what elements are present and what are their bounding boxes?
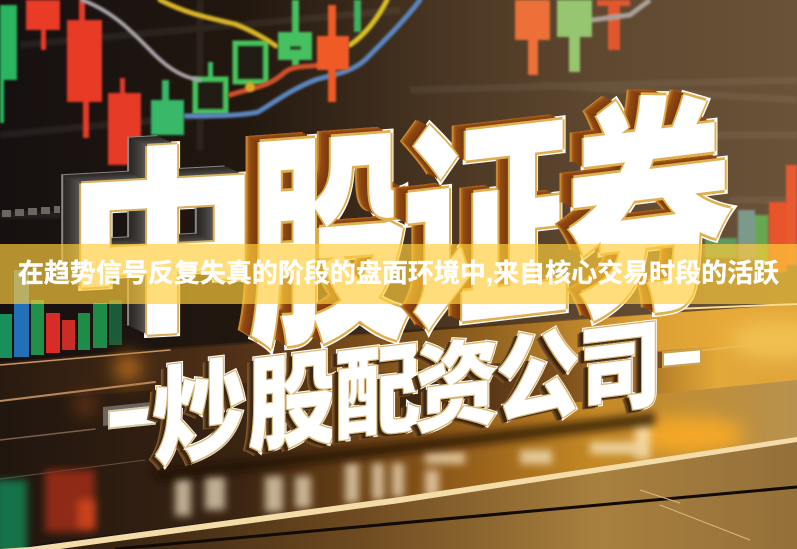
candlesticks over lines xyxy=(245,5,349,102)
base seam xyxy=(115,487,797,549)
character 中: 中 xyxy=(65,130,260,363)
trend lines xyxy=(82,0,420,116)
volume bars left xyxy=(0,270,122,358)
floor shadow beneath slogan xyxy=(150,412,655,482)
character 资: 资 xyxy=(415,328,499,445)
grid lines xyxy=(0,0,797,215)
caption band xyxy=(0,244,797,304)
character 公: 公 xyxy=(496,319,580,436)
character 股: 股 xyxy=(248,112,413,377)
volume bars right xyxy=(705,165,797,272)
base plate xyxy=(0,437,797,549)
character 炒: 炒 xyxy=(152,349,246,480)
right dash xyxy=(662,348,702,368)
floor shelves xyxy=(0,304,797,549)
copper glow reflections xyxy=(75,320,797,453)
dotted line xyxy=(2,206,60,217)
character reflections xyxy=(175,425,650,516)
caption text: 在趋势信号反复失真的阶段的盘面环境中,来自核心交易时段的活跃 xyxy=(18,258,779,288)
character 司: 司 xyxy=(578,310,662,427)
candlesticks right xyxy=(515,0,650,75)
character 配: 配 xyxy=(335,334,421,454)
character 股: 股 xyxy=(248,342,338,466)
candlesticks left xyxy=(0,0,361,165)
colored floor reflections xyxy=(0,470,96,549)
character 证: 证 xyxy=(402,95,570,363)
shelf highlight lines xyxy=(0,304,797,479)
left dash xyxy=(108,405,156,430)
character 券: 券 xyxy=(565,74,733,354)
